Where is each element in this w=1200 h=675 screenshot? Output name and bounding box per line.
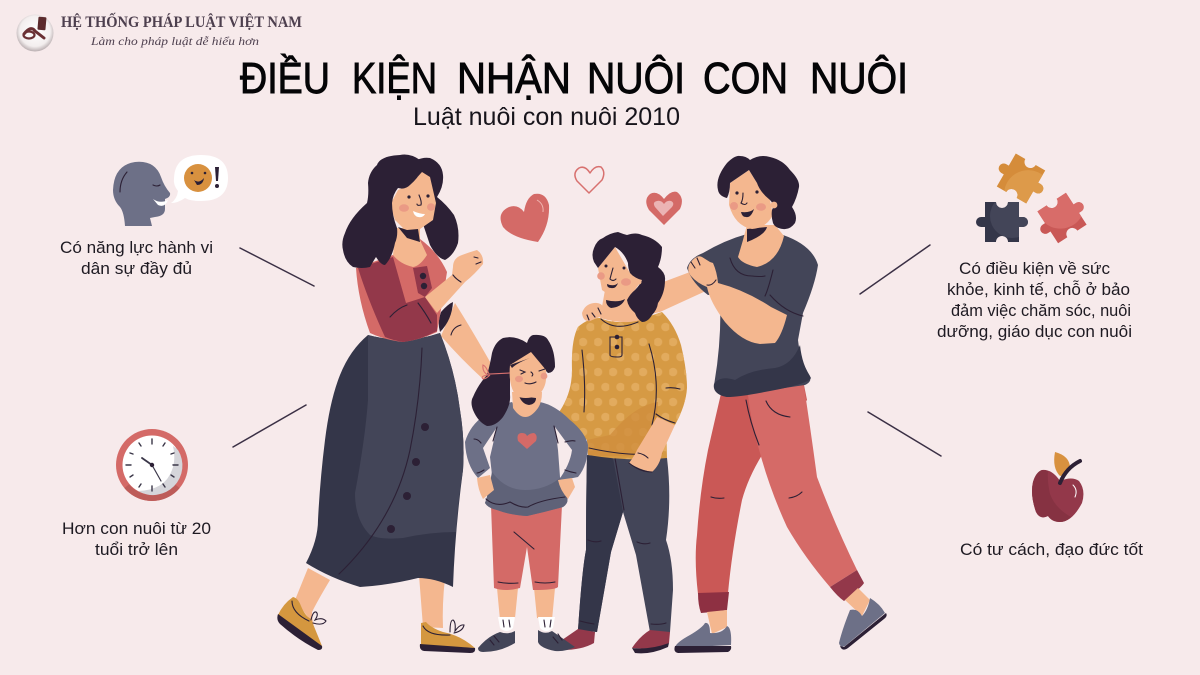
son shoes [562, 629, 670, 653]
brand name: HỆ THỐNG PHÁP LUẬT VIỆT NAM [61, 13, 302, 31]
son forearm [629, 417, 675, 472]
daughter socks [498, 617, 555, 631]
son face details [597, 264, 642, 288]
caption: age gap: tuổi trở lên [95, 540, 178, 559]
daughter legs [497, 588, 555, 620]
son trousers [578, 455, 673, 632]
caption: moral character: Có tư cách, đạo đức tốt [960, 540, 1143, 559]
title: KIỆN [352, 54, 437, 103]
mother shoes [277, 597, 475, 653]
logo [16, 14, 54, 52]
mother legs [295, 568, 445, 628]
father face [729, 170, 773, 229]
daughter neck [512, 392, 542, 417]
daughter heart badge [518, 433, 537, 449]
mother forearm and hand [425, 250, 483, 313]
daughter shorts [491, 505, 562, 590]
mother right hair [417, 158, 458, 260]
father cheeks and face details [730, 190, 777, 217]
daughter hair ribbon [482, 365, 510, 379]
father shoes [674, 598, 887, 653]
daughter face [510, 352, 546, 398]
figure: daughter [465, 335, 588, 652]
father back arm [610, 272, 708, 322]
caption: legal capacity [60, 238, 213, 278]
subtitle: Luật nuôi con nuôi 2010 [413, 103, 680, 131]
mother face [390, 172, 436, 229]
mother skirt [306, 333, 464, 587]
figure: mother [277, 155, 493, 653]
caption: health and finances: đảm việc chăm sóc, nuôi [951, 301, 1131, 320]
son hair [592, 232, 665, 322]
icon: solid heart [501, 194, 549, 242]
title: NHẬN [457, 54, 571, 103]
son neck and face [600, 290, 640, 322]
icon: clock [116, 429, 188, 501]
connector lines [233, 245, 941, 456]
title: ĐIỀU [240, 53, 330, 103]
caption: health and finances [937, 259, 1132, 341]
mother front hair [342, 155, 422, 268]
son sweater [557, 312, 687, 459]
father t-shirt [687, 234, 818, 397]
father hand on son's shoulder [582, 303, 607, 321]
mother blouse [356, 239, 447, 342]
caption: age gap: Hơn con nuôi từ 20 [62, 519, 211, 538]
father hair [717, 156, 799, 229]
brand tagline: Làm cho pháp luật dễ hiểu hơn [90, 35, 259, 48]
daughter hair [472, 335, 555, 426]
title: NUÔI [587, 53, 685, 103]
caption: health and finances: dưỡng, giáo dục con nuôi [937, 322, 1132, 341]
title: CON [703, 54, 788, 103]
daughter hands [477, 475, 575, 499]
caption: health and finances: Có điều kiện về sức [959, 259, 1110, 278]
icon: double heart [646, 192, 682, 225]
daughter top [465, 402, 588, 516]
caption: health and finances: khỏe, kinh tế, chỗ ở bảo [947, 280, 1130, 299]
father right foot [845, 588, 870, 616]
icon: talking head with speech bubble [113, 155, 228, 226]
mother back arm [441, 303, 493, 380]
icon: apple [1032, 452, 1083, 522]
father neck [738, 225, 784, 267]
mother neck and chest [393, 228, 427, 267]
father front arm [688, 256, 787, 344]
title: NUÔI [810, 53, 908, 103]
icon: puzzle pieces [976, 154, 1086, 244]
mother face details [399, 194, 435, 217]
figure: son [557, 232, 687, 653]
father trousers [696, 380, 864, 613]
father left foot [707, 610, 727, 634]
figure: father [610, 156, 887, 653]
icon: outline heart [575, 167, 604, 193]
caption: age gap [62, 519, 211, 559]
title [240, 53, 908, 103]
daughter shoes [478, 630, 575, 652]
caption: legal capacity: dân sự đầy đủ [81, 259, 192, 278]
caption: legal capacity: Có năng lực hành vi [60, 238, 213, 257]
